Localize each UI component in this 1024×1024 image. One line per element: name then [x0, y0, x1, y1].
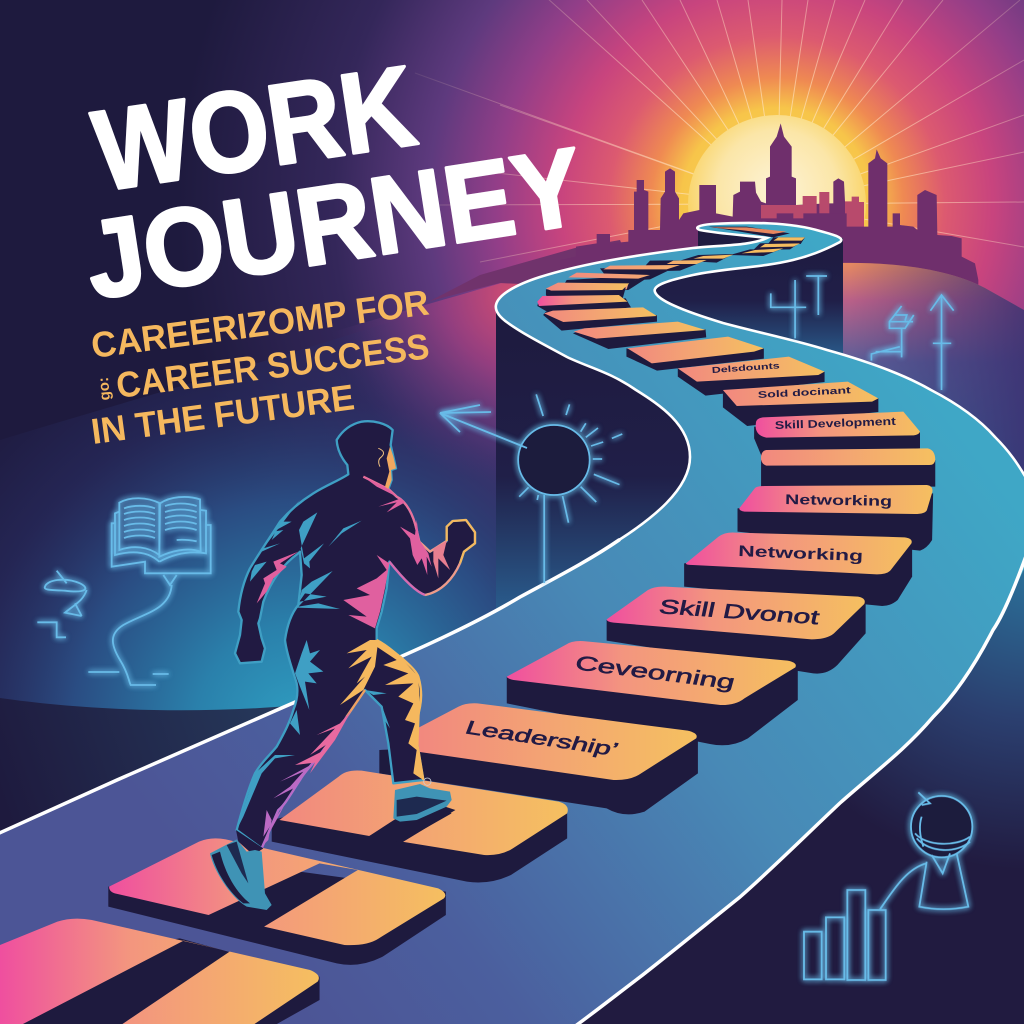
man: coloured edge light [262, 477, 475, 848]
man: teal highlights on jacket [250, 500, 362, 609]
step: blank 3 [543, 307, 657, 331]
icon: arrow from sun [440, 405, 527, 448]
subtitle line 2: CAREER SUCCESS [114, 325, 431, 406]
step: Ceveorning [507, 641, 798, 745]
subtitle line 3: IN THE FUTURE [89, 376, 357, 452]
icon: open book with cord [88, 497, 211, 685]
step: Leadership [379, 703, 698, 814]
left hillside background [0, 240, 640, 720]
step: stone under front foot [272, 770, 568, 882]
step: front stone [0, 919, 320, 1024]
man: pink highlights on jacket [257, 477, 450, 628]
icon: person and bar chart [804, 792, 972, 980]
step: Networking upper [738, 485, 933, 551]
label: Leadership: Leadership’ [462, 718, 621, 761]
sun rays [415, 0, 1024, 262]
running man [210, 421, 475, 910]
dark road wall, left [496, 305, 701, 617]
label: Networking lower: Networking [738, 543, 863, 565]
step: blank 2 [537, 295, 631, 316]
title [78, 43, 591, 323]
subtitle line 1: CAREERIZOMP FOR [89, 281, 431, 366]
icon: sun with rays [518, 394, 622, 583]
step: Skill Dvonot [607, 587, 866, 674]
step: blank 5 [626, 337, 764, 371]
lower right dark ground [560, 480, 1024, 1024]
pink glow on hillside [320, 240, 640, 520]
right hillside background [840, 263, 1024, 560]
step: Networking lower [684, 532, 912, 606]
subtitle small glyphs: go: [95, 376, 114, 401]
winding road [0, 223, 1024, 1024]
step: label Sold [723, 382, 878, 426]
man: trouser highlights [237, 640, 423, 847]
man: rear shoe [210, 830, 272, 910]
step labels [462, 360, 896, 761]
dark road wall, right [640, 226, 843, 362]
man: face and hair details [378, 447, 396, 489]
lower stepping stones [379, 485, 933, 814]
icon: tower doodle [871, 306, 914, 361]
icon: up arrow [930, 295, 954, 390]
icon: 4T doodle [771, 276, 827, 338]
title line: JOURNEY: JOURNEY [78, 125, 591, 323]
upper stepping stones [537, 283, 935, 487]
bottom stepping stones [0, 770, 568, 1024]
lower left dark ground [0, 698, 300, 840]
label: Skill Dvonot: Skill Dvonot [657, 596, 822, 629]
step: label Delsdounts [678, 357, 825, 396]
city skyline [560, 123, 978, 300]
icon: small scribble [37, 571, 87, 637]
label: Skill Development: Skill Development [775, 416, 896, 432]
ridge behind the road [430, 240, 640, 301]
label: Networking upper: Networking [785, 491, 892, 509]
label: Delsdounts: Delsdounts [711, 360, 780, 375]
distant stepping stones [560, 227, 805, 292]
label: Sold docinant: Sold docinant [758, 385, 852, 401]
step: blank 1 [546, 283, 629, 300]
label: Ceveorning: Ceveorning [573, 653, 737, 694]
man: front shoe [393, 778, 452, 822]
step: stone under rear foot [108, 838, 446, 965]
step: blank wide [761, 448, 935, 487]
sun disc [688, 115, 866, 293]
title line: WORK: WORK [86, 43, 423, 216]
step: blank 4 [573, 322, 706, 349]
subtitle [89, 281, 431, 452]
step: label Skill Development [754, 412, 920, 457]
neon doodles [37, 276, 972, 980]
man: body silhouette [235, 421, 475, 848]
